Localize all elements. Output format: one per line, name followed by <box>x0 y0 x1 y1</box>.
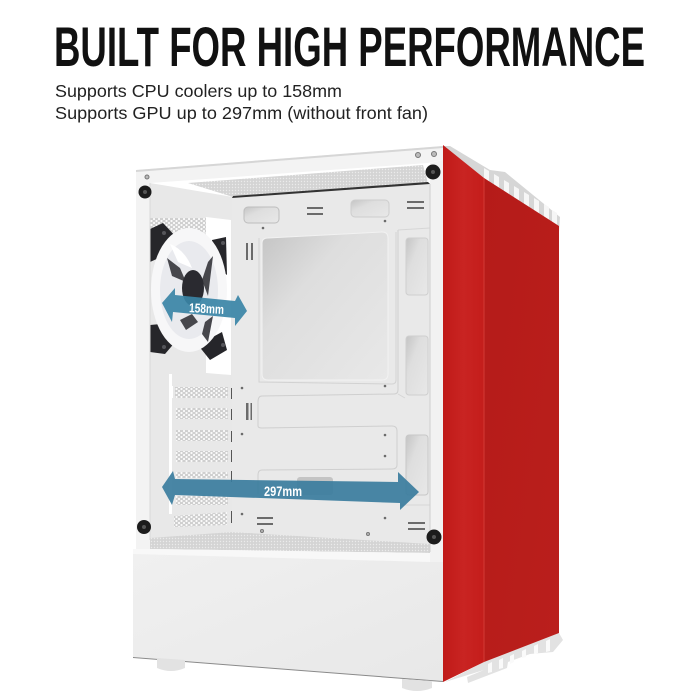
fan blades <box>167 256 213 342</box>
plate side slots <box>406 238 428 295</box>
plate raised outline <box>259 232 396 384</box>
plate main cutout <box>262 232 388 380</box>
top vent underside <box>188 165 428 197</box>
rear mesh <box>150 218 206 232</box>
case feet <box>157 658 432 691</box>
PSU cut-out <box>297 477 333 495</box>
floor of the case <box>150 532 430 553</box>
white rear fins <box>443 146 563 683</box>
arrow: 297mm GPU clearance <box>162 471 419 510</box>
subtitle text: Supports CPU coolers up to 158mm <box>55 81 342 101</box>
plate stamped panels <box>258 230 398 494</box>
subtitle text <box>55 81 428 123</box>
fan frame corners <box>150 223 227 360</box>
rear opening <box>206 217 231 375</box>
subtitle text: Supports GPU up to 297mm (without front fan) <box>55 103 428 123</box>
red side panel <box>443 145 559 682</box>
case frame <box>136 146 443 562</box>
fan <box>150 223 227 360</box>
case interior left wall <box>150 183 233 540</box>
arrow: 158mm CPU cooler clearance: 158mm <box>189 300 224 317</box>
front bottom panel <box>133 549 443 682</box>
PCI slot covers <box>169 374 233 527</box>
thumbscrews <box>137 152 442 544</box>
pc case product <box>133 145 563 691</box>
arrow: 158mm CPU cooler clearance <box>162 288 247 326</box>
plate top holes <box>244 207 279 223</box>
back plate top shadow <box>232 182 430 198</box>
plate slits and rivets <box>241 201 425 530</box>
back plate <box>232 184 430 544</box>
arrow: 297mm GPU clearance: 297mm <box>264 484 302 499</box>
